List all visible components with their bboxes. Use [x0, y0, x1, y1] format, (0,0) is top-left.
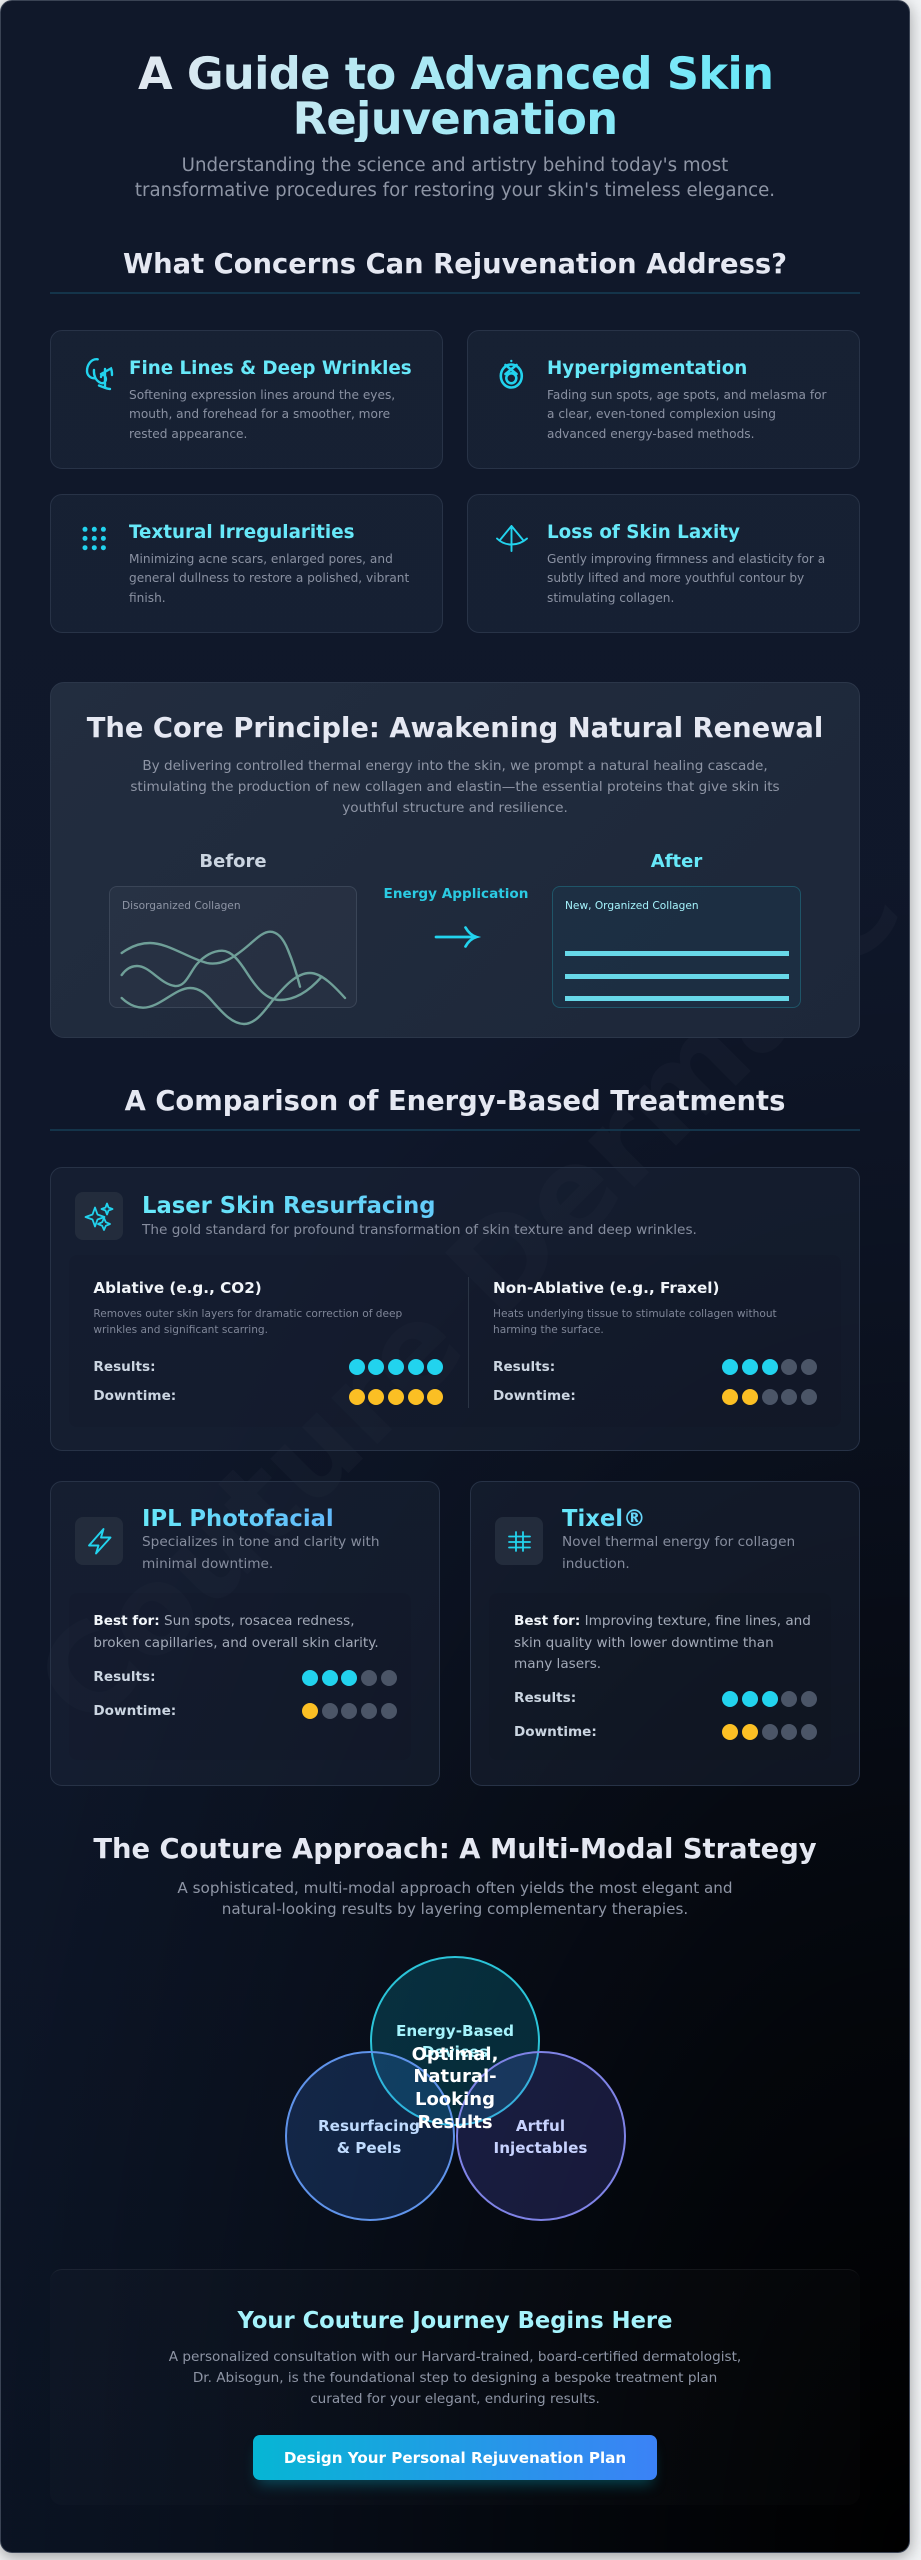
inner details panel — [489, 1593, 831, 1760]
best-for text: many lasers. — [514, 1656, 601, 1672]
column: ablative — [93, 1279, 443, 1405]
downtime row: Downtime: — [493, 1388, 576, 1404]
couture approach text: A sophisticated, multi-modal approach often yields the most elegant and — [177, 1878, 733, 1896]
label: centre result: Natural- — [413, 2066, 497, 2087]
card text: Fading sun spots, age spots, and melasma for — [547, 388, 827, 402]
explanation text: By delivering controlled thermal energy into the skin, we prompt a natural healing cascade, — [142, 758, 768, 774]
background watermark: Couture Derma C — [11, 837, 910, 1754]
card text — [547, 552, 825, 605]
panel: core principle — [50, 682, 860, 1038]
card heading: Fine Lines & Deep Wrinkles — [129, 358, 412, 378]
icon: lightning bolt — [75, 1517, 123, 1565]
icon: wrinkle lines — [86, 358, 114, 390]
icon: pigment ring — [500, 360, 524, 389]
treatment name — [142, 1191, 835, 1221]
results row: Results: — [93, 1359, 156, 1375]
heading: comparison: A Comparison of Energy-Based Treatments — [125, 1086, 785, 1117]
explanation text — [130, 758, 780, 816]
couture approach text — [177, 1878, 733, 1918]
title: A Guide to Advanced Skin — [138, 46, 773, 100]
downtime rating dots — [722, 1724, 817, 1740]
treatment summary: Specializes in tone and clarity with — [142, 1534, 380, 1550]
card heading: Loss of Skin Laxity — [547, 522, 740, 542]
panel: laser skin resurfacing — [50, 1167, 860, 1451]
treatment summary: induction. — [562, 1556, 630, 1572]
card heading: Textural Irregularities — [129, 522, 354, 542]
downtime row: Downtime: — [93, 1388, 176, 1404]
circle: artful injectables — [456, 2051, 626, 2221]
panel: loss of skin laxity — [467, 494, 860, 633]
best-for text: broken capillaries, and overall skin clarity. — [93, 1635, 379, 1651]
downtime rating dots — [722, 1389, 817, 1405]
arrow — [434, 926, 481, 948]
downtime rating dots — [349, 1389, 443, 1405]
panel: Tixel — [470, 1481, 860, 1786]
sub heading: Non-Ablative (e.g., Fraxel) — [493, 1279, 719, 1297]
subtitle — [135, 154, 775, 200]
subtitle: Understanding the science and artistry behind today's most — [182, 154, 728, 176]
label: artful injectables: Injectables — [494, 2139, 587, 2157]
description — [493, 1308, 777, 1336]
label: artful injectables — [494, 2117, 587, 2157]
results row: Results: — [493, 1359, 555, 1375]
panel: fine lines and wrinkles — [50, 330, 443, 469]
label: energy-based devices: Energy-Based — [396, 2022, 514, 2040]
energy label: Energy Application — [384, 886, 528, 902]
card text — [129, 388, 395, 441]
box caption: Disorganized Collagen — [122, 900, 241, 912]
explanation text: stimulating the production of new collagen and elastin—the essential proteins that give skin its — [130, 779, 780, 795]
downtime rating dots — [302, 1703, 397, 1719]
icon: lift arrow — [496, 525, 528, 552]
best-for text: Best for: Improving texture, fine lines, and — [514, 1613, 811, 1629]
CTA text: A personalized consultation with our Harvard-trained, board-certified dermatologist, — [169, 2349, 741, 2365]
diagram: disorganized collagen — [109, 886, 357, 1008]
panel: textural irregularities — [50, 494, 443, 633]
CTA button — [253, 2435, 657, 2480]
icon: dot grid — [82, 526, 106, 550]
label: centre result: Looking — [415, 2089, 495, 2110]
treatment summary: minimal downtime. — [142, 1556, 273, 1572]
card text — [129, 552, 409, 605]
CTA text: Dr. Abisogun, is the foundational step to designing a bespoke treatment plan — [193, 2370, 717, 2386]
icon: thermal grid — [495, 1517, 543, 1565]
box caption: New, Organized Collagen — [565, 900, 699, 912]
wavy collagen lines — [120, 930, 346, 1026]
label: resurfacing and peels: & Peels — [337, 2139, 401, 2157]
label: centre result — [412, 2044, 498, 2133]
card text: mouth, and forehead for a smoother, more — [129, 407, 390, 421]
results row: Results: — [514, 1690, 576, 1706]
panel: hyperpigmentation — [467, 330, 860, 469]
treatment summary: The gold standard for profound transformation of skin texture and deep wrinkles. — [142, 1222, 697, 1238]
card heading: Hyperpigmentation — [547, 358, 747, 378]
venn diagram — [285, 1956, 626, 2221]
treatment summary — [142, 1534, 380, 1572]
best-for text: Best for: Sun spots, rosacea redness, — [93, 1613, 355, 1629]
description: wrinkles and significant scarring. — [93, 1324, 268, 1336]
treatment name: Tixel® — [562, 1506, 646, 1532]
subtitle: transformative procedures for restoring your skin's timeless elegance. — [135, 180, 775, 200]
CTA heading: Your Couture Journey Begins Here — [238, 2308, 672, 2334]
column: non-ablative — [493, 1279, 817, 1405]
label: resurfacing and peels: Resurfacing — [318, 2117, 420, 2135]
description — [93, 1308, 402, 1336]
treatment name: Laser Skin Resurfacing — [142, 1193, 436, 1219]
card text: a clear, even-toned complexion using — [547, 407, 776, 421]
treatment name — [562, 1504, 835, 1534]
card text: stimulating collagen. — [547, 591, 674, 605]
best-for text — [93, 1613, 379, 1651]
icon: sparkles — [75, 1192, 123, 1240]
heading: couture approach: The Couture Approach: A Multi-Modal Strategy — [93, 1834, 817, 1865]
inner details panel — [69, 1593, 411, 1760]
circle: resurfacing and peels — [284, 2051, 454, 2221]
best-for text: skin quality with lower downtime than — [514, 1635, 774, 1651]
label: resurfacing and peels — [318, 2117, 420, 2157]
inner comparison panel — [69, 1255, 841, 1427]
sub heading: Ablative (e.g., CO2) — [93, 1279, 262, 1297]
collagen bar — [565, 974, 789, 978]
card text — [547, 388, 827, 441]
CTA button: Design Your Personal Rejuvenation Plan — [284, 2449, 626, 2467]
treatment summary: Novel thermal energy for collagen — [562, 1534, 795, 1550]
title — [138, 50, 772, 142]
panel: IPL photofacial — [50, 1481, 440, 1786]
card text: rested appearance. — [129, 427, 247, 441]
card text: Softening expression lines around the eyes, — [129, 388, 395, 402]
results row: Results: — [93, 1669, 156, 1685]
heading: The Core Principle: Awakening Natural Renewal — [87, 713, 823, 744]
description: harming the surface. — [493, 1324, 604, 1336]
CTA text: curated for your elegant, enduring results. — [310, 2391, 600, 2407]
card text: subtly lifted and more youthful contour by — [547, 571, 804, 585]
label: energy-based devices — [396, 2022, 514, 2061]
description: Removes outer skin layers for dramatic correction of deep — [93, 1308, 402, 1320]
diagram: organized collagen — [552, 886, 801, 1008]
results rating dots — [722, 1359, 817, 1375]
best-for text — [514, 1613, 811, 1672]
downtime row: Downtime: — [93, 1702, 176, 1718]
explanation text: youthful structure and resilience. — [342, 800, 568, 816]
CTA text — [168, 2349, 741, 2407]
card text: general dullness to restore a polished, vibrant — [129, 571, 409, 585]
label: energy-based devices: Devices — [422, 2043, 488, 2061]
treatment name: IPL Photofacial — [142, 1506, 334, 1532]
card text: advanced energy-based methods. — [547, 427, 754, 441]
before label: Before — [199, 851, 267, 872]
circle: energy-based devices — [370, 1956, 540, 2126]
title: Rejuvenation — [293, 92, 617, 145]
label: centre result: Results — [417, 2112, 493, 2133]
label: artful injectables: Artful — [516, 2117, 565, 2135]
card text: finish. — [129, 591, 166, 605]
downtime row: Downtime: — [514, 1724, 597, 1740]
results rating dots — [722, 1691, 817, 1707]
panel: call to action — [50, 2269, 860, 2505]
results rating dots — [302, 1670, 397, 1686]
collagen bar — [565, 996, 789, 1001]
heading: concerns: What Concerns Can Rejuvenation Address? — [123, 249, 787, 280]
treatment summary — [562, 1534, 795, 1572]
after label: After — [651, 851, 702, 872]
label: centre result: Optimal, — [412, 2044, 498, 2065]
results rating dots — [349, 1359, 443, 1375]
couture approach text: natural-looking results by layering complementary therapies. — [222, 1900, 688, 1918]
treatment name — [142, 1504, 415, 1534]
card text: Gently improving firmness and elasticity for a — [547, 552, 825, 566]
card text: Minimizing acne scars, enlarged pores, and — [129, 552, 393, 566]
description: Heats underlying tissue to stimulate collagen without — [493, 1308, 777, 1320]
collagen bar — [565, 951, 789, 956]
